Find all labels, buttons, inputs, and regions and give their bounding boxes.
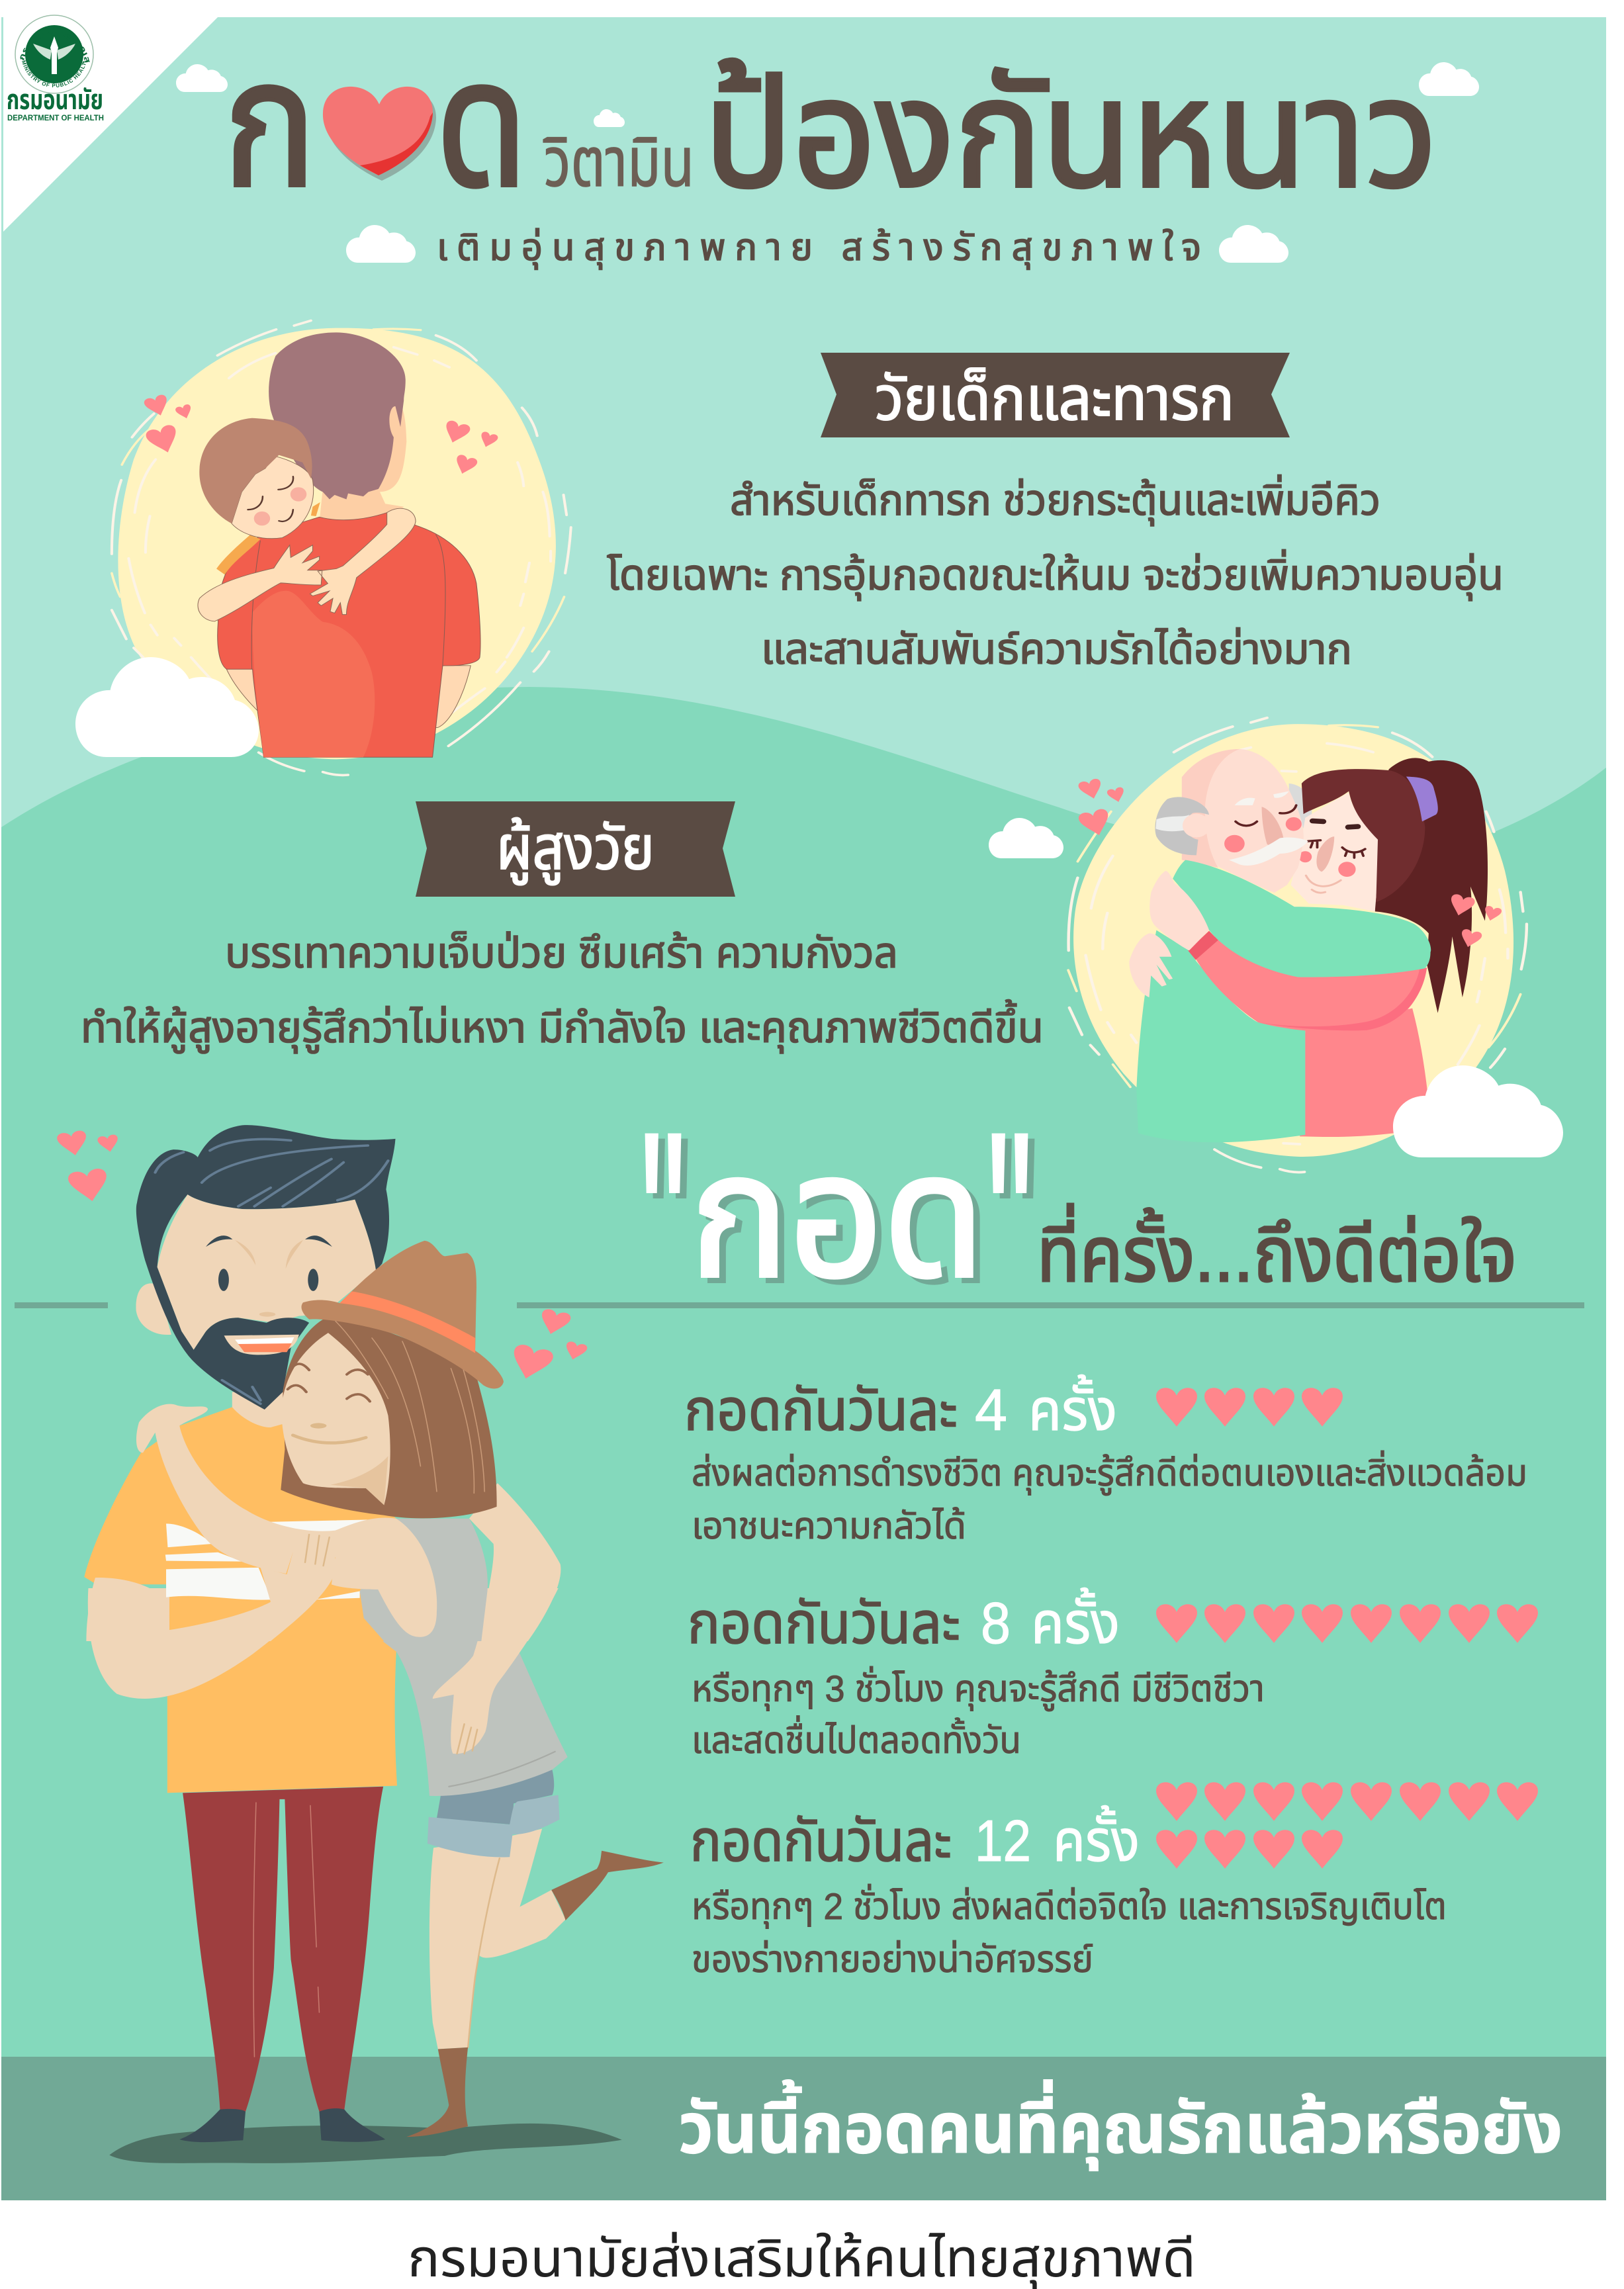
man arm	[1173, 860, 1431, 977]
title	[224, 24, 1437, 223]
text block: elderly	[81, 929, 1044, 1054]
hearts	[1077, 778, 1502, 950]
cloud	[75, 657, 259, 757]
illustration: couple hugging	[56, 1125, 664, 2163]
illustration: parent hugging child	[112, 320, 571, 775]
child head	[232, 456, 314, 539]
man hand	[1150, 871, 1209, 950]
row: 12 times a day: กอดกันวันละ	[690, 1808, 952, 1873]
footer: กรมอนามัยส่งเสริมให้คนไทยสุขภาพดี	[408, 2229, 1196, 2289]
logo: department of health	[7, 15, 104, 122]
parent neck	[320, 402, 406, 524]
child arms	[198, 508, 416, 621]
row: 4 times a day: 4	[975, 1377, 1007, 1443]
divider right	[517, 1302, 1584, 1308]
row: 12 times a day: ครั้ง	[1053, 1805, 1140, 1873]
bottom band	[1, 2057, 1606, 2200]
subtitle clouds	[346, 225, 1288, 263]
ribbon: elderly	[416, 801, 735, 897]
cloud	[1393, 1065, 1563, 1157]
title clouds	[176, 62, 1479, 127]
title: ป้องกันหนาว	[704, 50, 1437, 218]
ground shadow and lower body	[88, 1588, 664, 2163]
row: 8 times a day	[688, 1588, 1538, 1761]
row: 8 times a day: 8	[981, 1590, 1011, 1656]
text block: children: โดยเฉพาะ การอุ้มกอดขณะให้นม จะช่วยเพิ่มความอบอุ่น	[607, 549, 1504, 601]
woman arm	[1189, 935, 1427, 1032]
man back hair	[1289, 784, 1312, 833]
woman body	[1300, 1009, 1431, 1137]
title: ก	[224, 24, 316, 223]
row: 12 times a day: หรือทุกๆ 2 ชั่วโมง ส่งผลดีต่อจิตใจ และการเจริญเติบโต	[692, 1883, 1447, 1928]
row: 4 times a day: เอาชนะความกลัวได้	[692, 1505, 966, 1547]
heading: hug: กอด	[690, 1119, 985, 1313]
row: 8 times a day: หรือทุกๆ 3 ชั่วโมง คุณจะรู้สึกดี มีชีวิตชีวา	[692, 1666, 1265, 1711]
cloud	[989, 818, 1063, 858]
row: 4 times a day: ครั้ง	[1028, 1374, 1117, 1443]
heading: how many times: ที่ครั้ง...ถึงดีต่อใจ	[1037, 1203, 1517, 1298]
parent hair	[269, 332, 406, 500]
row: 4 times a day: กอดกันวันละ	[684, 1377, 958, 1443]
white corner	[3, 17, 218, 232]
woman face	[1290, 793, 1400, 911]
text block: children	[607, 474, 1504, 673]
parent shirt	[218, 513, 480, 757]
logo: department of health: DEPARTMENT OF HEALTH	[7, 113, 104, 122]
callout: bottom banner text: วันนี้กอดคนที่คุณรักแล้วหรือยัง	[678, 2080, 1562, 2171]
title: ด	[436, 24, 527, 223]
hearts	[143, 394, 499, 476]
ribbon: children	[821, 353, 1290, 437]
row: 4 times a day: ส่งผลต่อการดำรงชีวิต คุณจะรู้สึกดีต่อตนเองและสิ่งแวดล้อม	[692, 1450, 1527, 1496]
ribbon heading: วัยเด็กและทารก	[875, 365, 1234, 433]
row: 8 times a day: และสดชื่นไปตลอดทั้งวัน	[692, 1715, 1021, 1761]
text block: children: และสานสัมพันธ์ความรักได้อย่างมาก	[761, 625, 1352, 673]
woman hair back	[1375, 758, 1488, 1013]
text block: elderly: บรรเทาความเจ็บป่วย ซึมเศร้า ความกังวล	[225, 929, 898, 977]
icon: title heart	[323, 87, 436, 181]
hearts: 8	[1156, 1604, 1538, 1643]
ribbon heading: ผู้สูงวัย	[496, 815, 654, 885]
row: 12 times a day: 12	[975, 1808, 1031, 1873]
woman hand	[1129, 933, 1173, 997]
heading: hug: "	[641, 1079, 686, 1368]
hearts: 4	[1156, 1388, 1343, 1427]
upper body and heads	[56, 1125, 588, 1641]
man body	[1136, 930, 1305, 1142]
text block: elderly: ทำให้ผู้สูงอายุรู้สึกว่าไม่เหงา มีกำลังใจ และคุณภาพชีวิตดีขึ้น	[81, 999, 1044, 1054]
row: 12 times a day	[690, 1782, 1538, 1980]
man head	[1182, 749, 1304, 893]
man face detail	[1224, 791, 1308, 866]
row: 4 times a day	[684, 1374, 1527, 1547]
row: 8 times a day: ครั้ง	[1031, 1588, 1120, 1656]
child sleeve	[216, 502, 320, 574]
divider left	[15, 1302, 108, 1308]
row: 8 times a day: กอดกันวันละ	[688, 1590, 960, 1656]
heading: hug	[641, 1079, 1032, 1368]
hearts	[56, 1130, 588, 1383]
title: วิตามิน	[543, 124, 694, 201]
illustration: elder and daughter hugging	[1068, 718, 1527, 1172]
parent arms	[226, 666, 471, 728]
hearts: 12	[1156, 1782, 1538, 1869]
background hill	[1, 687, 1606, 2200]
logo: department of health: กรมอนามัย	[7, 84, 103, 115]
subtitle: เติมอุ่นสุขภาพกาย สร้างรักสุขภาพใจ	[437, 226, 1201, 269]
text block: children: สำหรับเด็กทารก ช่วยกระตุ้นและเพิ่มอีคิว	[730, 474, 1380, 526]
text: "	[987, 1079, 1032, 1368]
woman front hair	[1302, 769, 1425, 902]
row: 12 times a day: ของร่างกายอย่างน่าอัศจรรย์	[692, 1938, 1093, 1980]
